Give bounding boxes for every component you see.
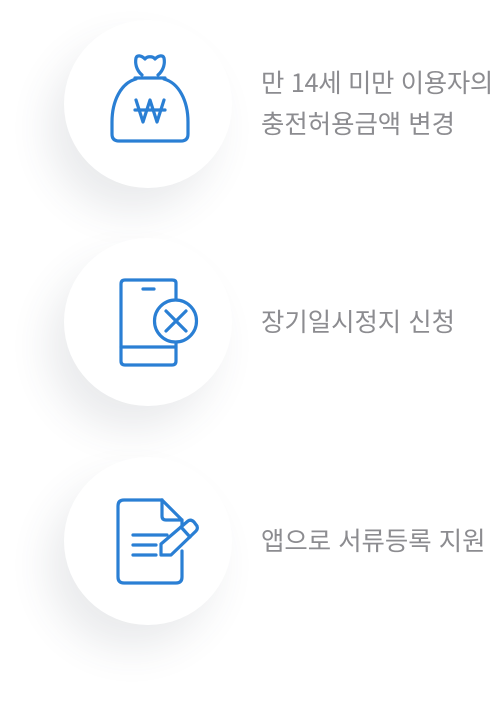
icon: phone with x badge (121, 280, 196, 365)
circle: phone item (64, 238, 232, 406)
text: item 1: 충전허용금액 변경 (261, 105, 455, 141)
text: item 1: 만 14세 미만 이용자의 (261, 64, 492, 100)
text: item 2: 장기일시정지 신청 (261, 303, 455, 339)
circle: money bag item (64, 20, 232, 188)
icon: document with pencil (118, 500, 197, 583)
text: item 1 (261, 64, 492, 141)
icon: money bag with won sign (112, 56, 188, 141)
text: item 3: 앱으로 서류등록 지원 (261, 522, 485, 558)
circle: document item (64, 457, 232, 625)
